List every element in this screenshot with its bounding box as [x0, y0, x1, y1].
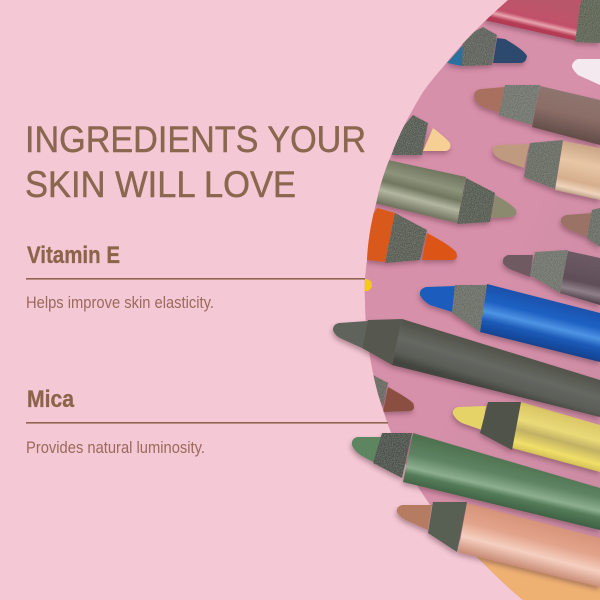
pencil: navy tip [447, 27, 527, 66]
pencil: blue [420, 284, 600, 362]
pencil: rose gold [493, 140, 600, 200]
pencil: olive [375, 160, 516, 224]
heading: Vitamin E: Vitamin E [27, 242, 120, 269]
pencil: small brown [373, 375, 414, 412]
pencil: dark grey [333, 319, 600, 417]
mauve photo backdrop [340, 0, 600, 600]
title: INGREDIENTS YOUR [25, 118, 366, 160]
pencil: brown [474, 85, 600, 145]
pencil: orange [366, 208, 457, 263]
ingredient: Vitamin E [26, 242, 365, 312]
peach surface corner [476, 556, 600, 600]
ingredient: Mica [26, 386, 388, 457]
title: SKIN WILL LOVE [25, 163, 296, 205]
photo of eye pencils clipped to oval [340, 0, 600, 600]
pencil: green [352, 433, 600, 530]
pencil: yellow [453, 402, 600, 472]
heading: Mica: Mica [27, 386, 75, 413]
pencil: yellow dot tip [364, 279, 372, 291]
pencil: plum grey [503, 250, 600, 305]
pencil: copper [397, 502, 600, 587]
pencil: white tip [572, 59, 600, 85]
pencil: crimson [484, 0, 600, 43]
pencil: cream [392, 115, 450, 155]
pencil: taupe [561, 208, 600, 247]
description: Vitamin E: Helps improve skin elasticity. [26, 294, 214, 312]
title [25, 118, 366, 205]
description: Mica: Provides natural luminosity. [26, 439, 205, 457]
